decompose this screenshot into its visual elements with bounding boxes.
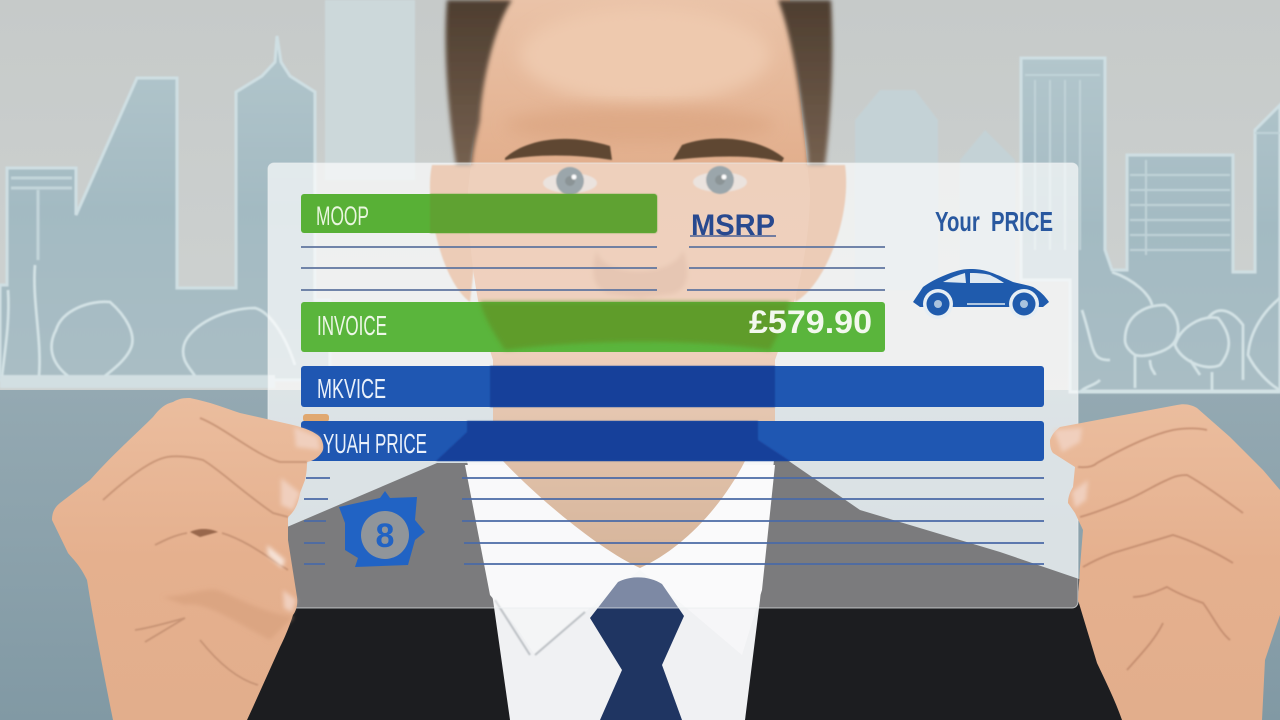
bar: MSRP green <box>301 194 657 233</box>
rules: lower <box>304 478 1044 564</box>
person <box>230 0 1125 720</box>
hair left <box>446 0 512 165</box>
shirt collar right <box>640 465 775 655</box>
bar: invoice blue: MKVICE <box>317 373 386 404</box>
bar: invoice green <box>301 302 885 352</box>
left hand <box>52 398 323 720</box>
finger shadows <box>190 529 218 537</box>
icon: car <box>913 269 1049 319</box>
price value: £579.90 <box>749 304 872 340</box>
skin: face and neck <box>468 0 810 568</box>
ears <box>430 165 486 302</box>
shirt <box>465 450 775 720</box>
tie <box>590 577 684 720</box>
bar: invoice blue <box>301 366 1044 407</box>
trees and ground line <box>0 265 1280 391</box>
bar: MSRP green: MOOP <box>316 201 369 231</box>
heading: Your PRICE: Your PRICE <box>935 206 1053 237</box>
forehead highlight <box>520 7 770 103</box>
finger creases <box>103 418 307 685</box>
orange tab <box>303 414 329 422</box>
nose <box>593 250 687 298</box>
city skyline <box>0 0 1280 392</box>
rules: upper left <box>301 247 657 290</box>
rules: upper right <box>687 247 885 290</box>
panel: glass price card <box>268 163 1078 608</box>
suit <box>230 446 1125 720</box>
fingernails <box>267 427 320 612</box>
heading: MSRP: MSRP <box>691 209 775 242</box>
eyebrows <box>505 139 612 160</box>
collar shadows <box>495 600 585 655</box>
fingernails <box>1054 428 1088 508</box>
hair right <box>778 0 832 165</box>
icon: gear badge <box>339 491 425 567</box>
bar: your price blue <box>301 421 1044 461</box>
bar: invoice green: INVOICE <box>317 310 387 341</box>
right hand <box>1050 404 1280 720</box>
left buildings <box>0 36 330 380</box>
right buildings <box>1021 58 1280 392</box>
finger creases <box>1078 428 1243 670</box>
shirt collar left <box>465 465 640 655</box>
brow shadow <box>505 107 775 143</box>
eyes <box>543 166 747 195</box>
panel backing <box>268 163 1078 608</box>
bar: your price blue: YUAH PRICE <box>323 428 427 459</box>
icon: gear badge: 8 <box>376 517 394 555</box>
